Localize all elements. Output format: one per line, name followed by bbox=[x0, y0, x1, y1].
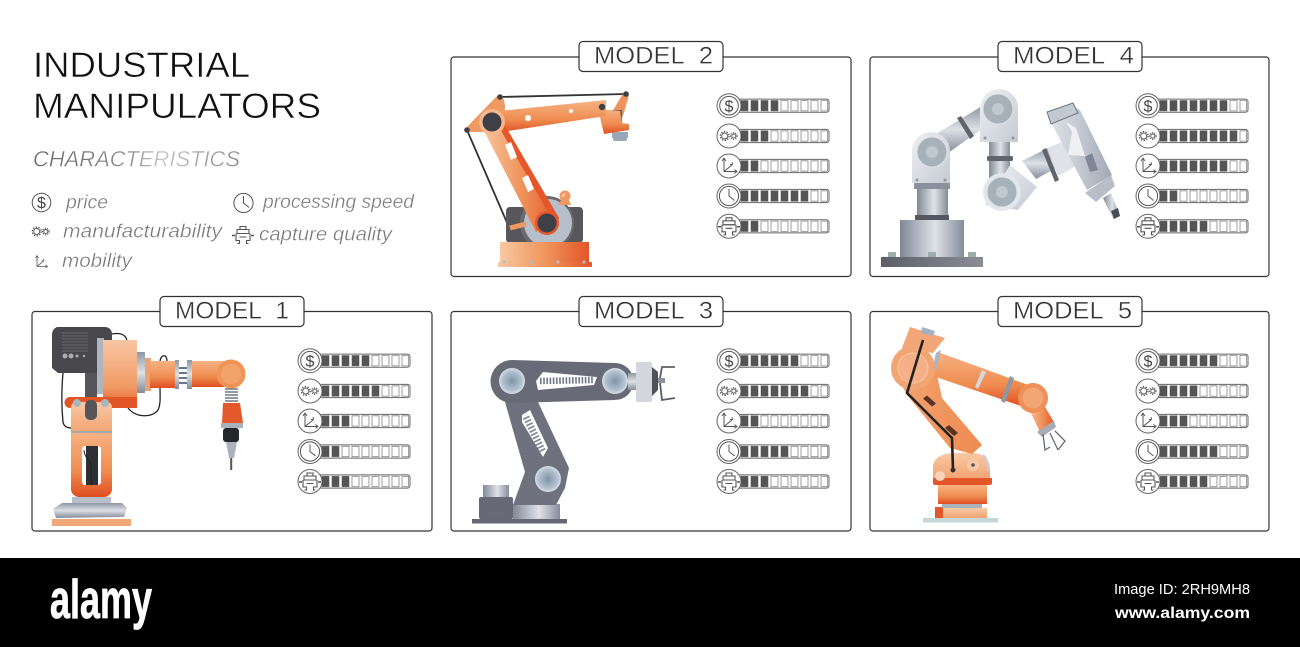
rating: manufacturability 3 bbox=[717, 124, 829, 148]
rating: capture quality 2 bbox=[717, 214, 829, 238]
rating: manufacturability 8 bbox=[1136, 124, 1248, 148]
legend item: mobility: mobility bbox=[62, 251, 134, 272]
rating: price 6 bbox=[717, 349, 829, 373]
heading: model 2: MODEL 2 bbox=[594, 42, 713, 70]
rating: capture quality 5 bbox=[1136, 214, 1248, 238]
rating: mobility 2 bbox=[717, 154, 829, 178]
rating: manufacturability 6 bbox=[298, 379, 410, 403]
rating: mobility 3 bbox=[298, 409, 410, 433]
heading: model 1: MODEL 1 bbox=[175, 298, 289, 324]
robot arm: model 4 bbox=[881, 89, 1120, 267]
panel: model 2 bbox=[451, 42, 851, 276]
rating: processing speed 6 bbox=[1136, 440, 1248, 464]
legend item: price bbox=[32, 192, 108, 214]
footer logo: alamy bbox=[50, 568, 152, 630]
robot arm: model 5 bbox=[891, 327, 1065, 522]
rating: mobility 7 bbox=[1136, 154, 1248, 178]
title: MANIPULATORS bbox=[33, 87, 321, 126]
rating: price 4 bbox=[717, 94, 829, 118]
legend item: capture quality: capture quality bbox=[259, 224, 394, 246]
legend item: price: price bbox=[65, 192, 108, 214]
robot arm: model 2 bbox=[464, 91, 629, 267]
footer image id: Image ID: 2RH9MH8 bbox=[1114, 582, 1250, 598]
rating: mobility 2 bbox=[717, 409, 829, 433]
heading: model 5: MODEL 5 bbox=[1013, 298, 1132, 324]
rating: capture quality 5 bbox=[1136, 470, 1248, 494]
panel: model 1 bbox=[32, 296, 432, 531]
subtitle: characteristics: CHARACTERISTICS bbox=[33, 146, 240, 172]
rating: processing speed 7 bbox=[717, 184, 829, 208]
rating: processing speed 2 bbox=[298, 440, 410, 464]
legend item: manufacturability: manufacturability bbox=[63, 222, 224, 242]
robot arm: model 1 bbox=[52, 327, 246, 526]
heading: model 4: MODEL 4 bbox=[1013, 42, 1134, 70]
legend bbox=[32, 192, 415, 272]
heading: model 3: MODEL 3 bbox=[594, 298, 713, 324]
rating: capture quality 3 bbox=[298, 470, 410, 494]
rating: manufacturability 4 bbox=[1136, 379, 1248, 403]
title: INDUSTRIAL bbox=[33, 46, 250, 85]
rating: price 5 bbox=[298, 349, 410, 373]
rating: manufacturability 7 bbox=[717, 379, 829, 403]
footer url: www.alamy.com bbox=[1114, 605, 1250, 622]
panel: model 3 bbox=[451, 296, 851, 531]
footer: watermark band bbox=[0, 558, 1300, 647]
panel: model 5 bbox=[870, 296, 1269, 531]
rating: price 6 bbox=[1136, 349, 1248, 373]
rating: price 7 bbox=[1136, 94, 1248, 118]
robot arm: model 3 bbox=[472, 360, 675, 524]
legend item: processing speed: processing speed bbox=[262, 192, 415, 213]
rating: capture quality 3 bbox=[717, 470, 829, 494]
rating: mobility 3 bbox=[1136, 409, 1248, 433]
legend item: mobility bbox=[35, 251, 134, 272]
title bbox=[33, 46, 321, 126]
rating: processing speed 2 bbox=[1136, 184, 1248, 208]
rating: processing speed 5 bbox=[717, 440, 829, 464]
panel: model 4 bbox=[870, 42, 1269, 276]
